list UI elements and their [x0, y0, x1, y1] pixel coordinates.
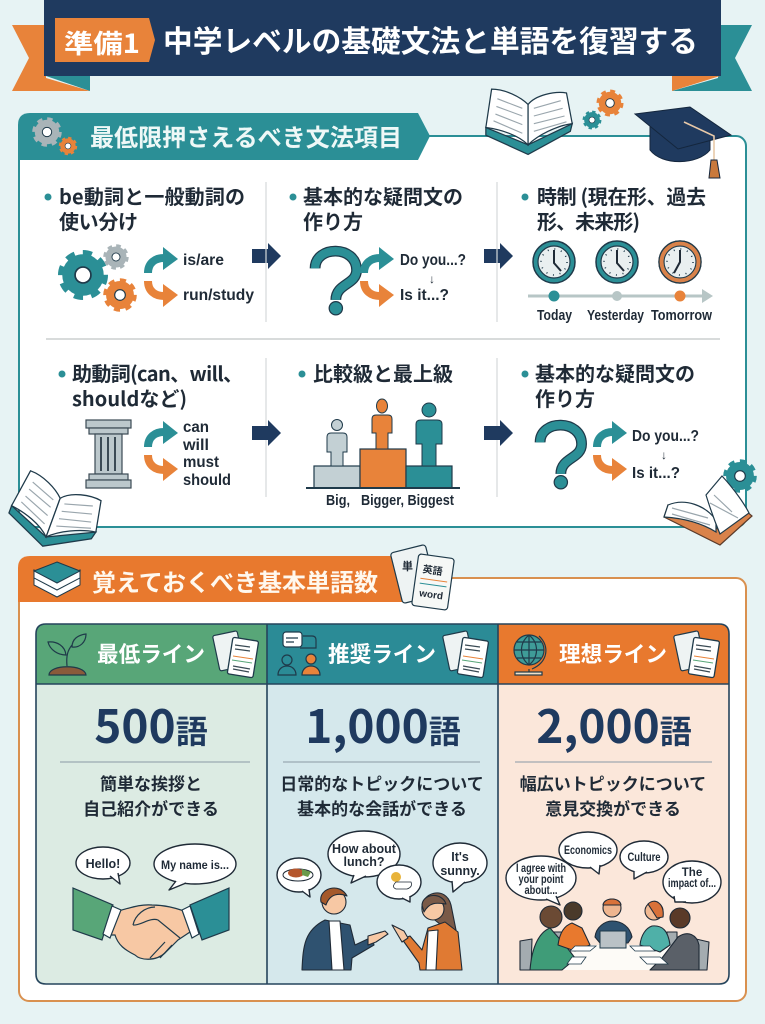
item: comparatives: 比較級と最上級	[313, 358, 453, 387]
papers	[567, 946, 668, 964]
icon: graduation cap	[635, 107, 731, 178]
icon: people talking	[278, 632, 320, 675]
column: minimum: 最低ライン	[97, 637, 205, 669]
icon: top book	[486, 89, 572, 154]
icon: pillar	[86, 420, 131, 488]
icon: sprout	[48, 634, 86, 675]
item: question forms: 作り方	[303, 206, 363, 235]
icon: word cards	[390, 544, 454, 610]
column: minimum: 自己紹介ができる	[83, 795, 219, 820]
item: tenses: 時制 (現在形、過去	[537, 181, 706, 210]
illustration: meeting: I agree with	[516, 863, 566, 875]
illustration: conversation: sunny.	[440, 864, 480, 878]
arrow	[252, 420, 281, 446]
podium	[306, 449, 460, 488]
icon: word cards: 単	[402, 558, 413, 574]
vocabulary table	[36, 624, 729, 984]
item: auxiliary verbs: shouldなど)	[72, 383, 187, 412]
column: minimum: 500語	[94, 691, 208, 757]
item: be verbs: run/study	[183, 287, 254, 304]
arrow	[484, 420, 513, 446]
heading: vocabulary	[18, 556, 418, 602]
column: minimum: 簡単な挨拶と	[100, 770, 202, 795]
icon: cards	[213, 631, 259, 678]
illustration: conversation: lunch?	[344, 855, 384, 869]
icon: cards	[674, 631, 720, 678]
heading: grammar: 最低限押さえるべき文法項目	[90, 118, 402, 153]
people	[327, 399, 442, 466]
badge: 準備1	[55, 18, 155, 62]
icon: word cards: word	[417, 588, 444, 602]
illustration: handshake: My name is...	[161, 858, 229, 872]
illustration: meeting: The	[682, 867, 702, 879]
illustration: meeting: Culture	[628, 850, 661, 864]
item: question forms 2: ↓	[661, 448, 667, 462]
icon: globe	[514, 635, 546, 675]
column: recommended: 1,000語	[305, 691, 461, 757]
arrow	[252, 243, 281, 269]
illustration: meeting: about...	[524, 885, 558, 897]
laptop	[600, 931, 626, 948]
icon: right book	[664, 476, 752, 545]
timeline	[528, 289, 713, 303]
column: recommended: 基本的な会話ができる	[297, 795, 467, 820]
item: be verbs: 使い分け	[59, 206, 138, 235]
column: minimum	[36, 624, 267, 984]
illustration: meeting: impact of...	[668, 878, 716, 890]
item: auxiliary verbs: should	[183, 472, 231, 489]
man	[302, 888, 388, 970]
item: be verbs: is/are	[183, 252, 224, 269]
item: question forms 2: 基本的な疑問文の	[535, 358, 695, 387]
woman	[392, 893, 462, 970]
icon: right gear	[726, 462, 754, 490]
item: auxiliary verbs: must	[183, 454, 220, 471]
item: tenses	[522, 181, 713, 324]
heading: grammar	[18, 113, 430, 160]
illustration: conversation: It's	[451, 850, 469, 864]
item: question forms 2	[522, 358, 699, 489]
panel: grammar items	[18, 113, 746, 527]
column: ideal: 理想ライン	[559, 637, 667, 669]
illustration: conversation: How about	[332, 842, 397, 856]
icon: word cards: 英語	[422, 561, 444, 578]
icon: top gears	[584, 91, 622, 128]
item: tenses: Tomorrow	[651, 308, 713, 324]
chairs	[520, 932, 709, 970]
title banner	[12, 0, 752, 91]
icon: cards	[443, 631, 489, 678]
column: ideal	[498, 624, 729, 984]
illustration: handshake	[73, 844, 236, 959]
item: question forms	[290, 181, 466, 315]
item: be verbs: be動詞と一般動詞の	[59, 181, 245, 210]
item: auxiliary verbs: 助動詞(can、will、	[72, 358, 243, 387]
item: auxiliary verbs	[58, 358, 243, 489]
people	[530, 899, 699, 970]
illustration: meeting: Economics	[564, 843, 612, 857]
column: ideal: 幅広いトピックについて	[520, 770, 706, 795]
icon: left book	[2, 469, 108, 562]
arrow	[484, 243, 513, 269]
item: comparatives	[298, 358, 460, 509]
column: ideal: 意見交換ができる	[545, 795, 681, 820]
table outline	[36, 624, 729, 984]
column: recommended	[267, 624, 498, 984]
icon: book stack	[34, 562, 80, 597]
column: ideal: 2,000語	[536, 691, 692, 757]
badge: 準備1: 準備1	[64, 24, 140, 61]
column: recommended: 推奨ライン	[328, 637, 436, 669]
illustration: conversation	[277, 831, 487, 970]
item: tenses: Today	[537, 308, 572, 324]
item: question forms 2: 作り方	[535, 383, 595, 412]
item: question forms 2: Is it...?	[632, 465, 680, 482]
illustration: handshake: Hello!	[86, 857, 120, 871]
title text: 中学レベルの基礎文法と単語を復習する	[163, 17, 698, 61]
heading: vocabulary: 覚えておくべき基本単語数	[92, 563, 378, 598]
item: tenses: Yesterday	[587, 308, 644, 324]
item: question forms 2: Do you...?	[632, 428, 699, 445]
item: question forms: 基本的な疑問文の	[303, 181, 463, 210]
panel: vocabulary	[18, 544, 746, 1001]
item: question forms: ↓	[429, 272, 435, 286]
item: auxiliary verbs: can	[183, 419, 209, 436]
illustration: meeting	[506, 832, 721, 970]
column: recommended: 日常的なトピックについて	[280, 770, 484, 795]
item: question forms: Is it...?	[400, 287, 449, 304]
table	[530, 945, 695, 970]
item: be verbs	[44, 181, 254, 309]
item: tenses: 形、未来形)	[537, 206, 640, 235]
item: comparatives: Big,	[326, 493, 350, 509]
item: comparatives: Bigger, Biggest	[361, 493, 454, 509]
item: question forms: Do you...?	[400, 252, 466, 269]
item: auxiliary verbs: will	[182, 437, 209, 454]
illustration: meeting: your point	[518, 874, 564, 886]
